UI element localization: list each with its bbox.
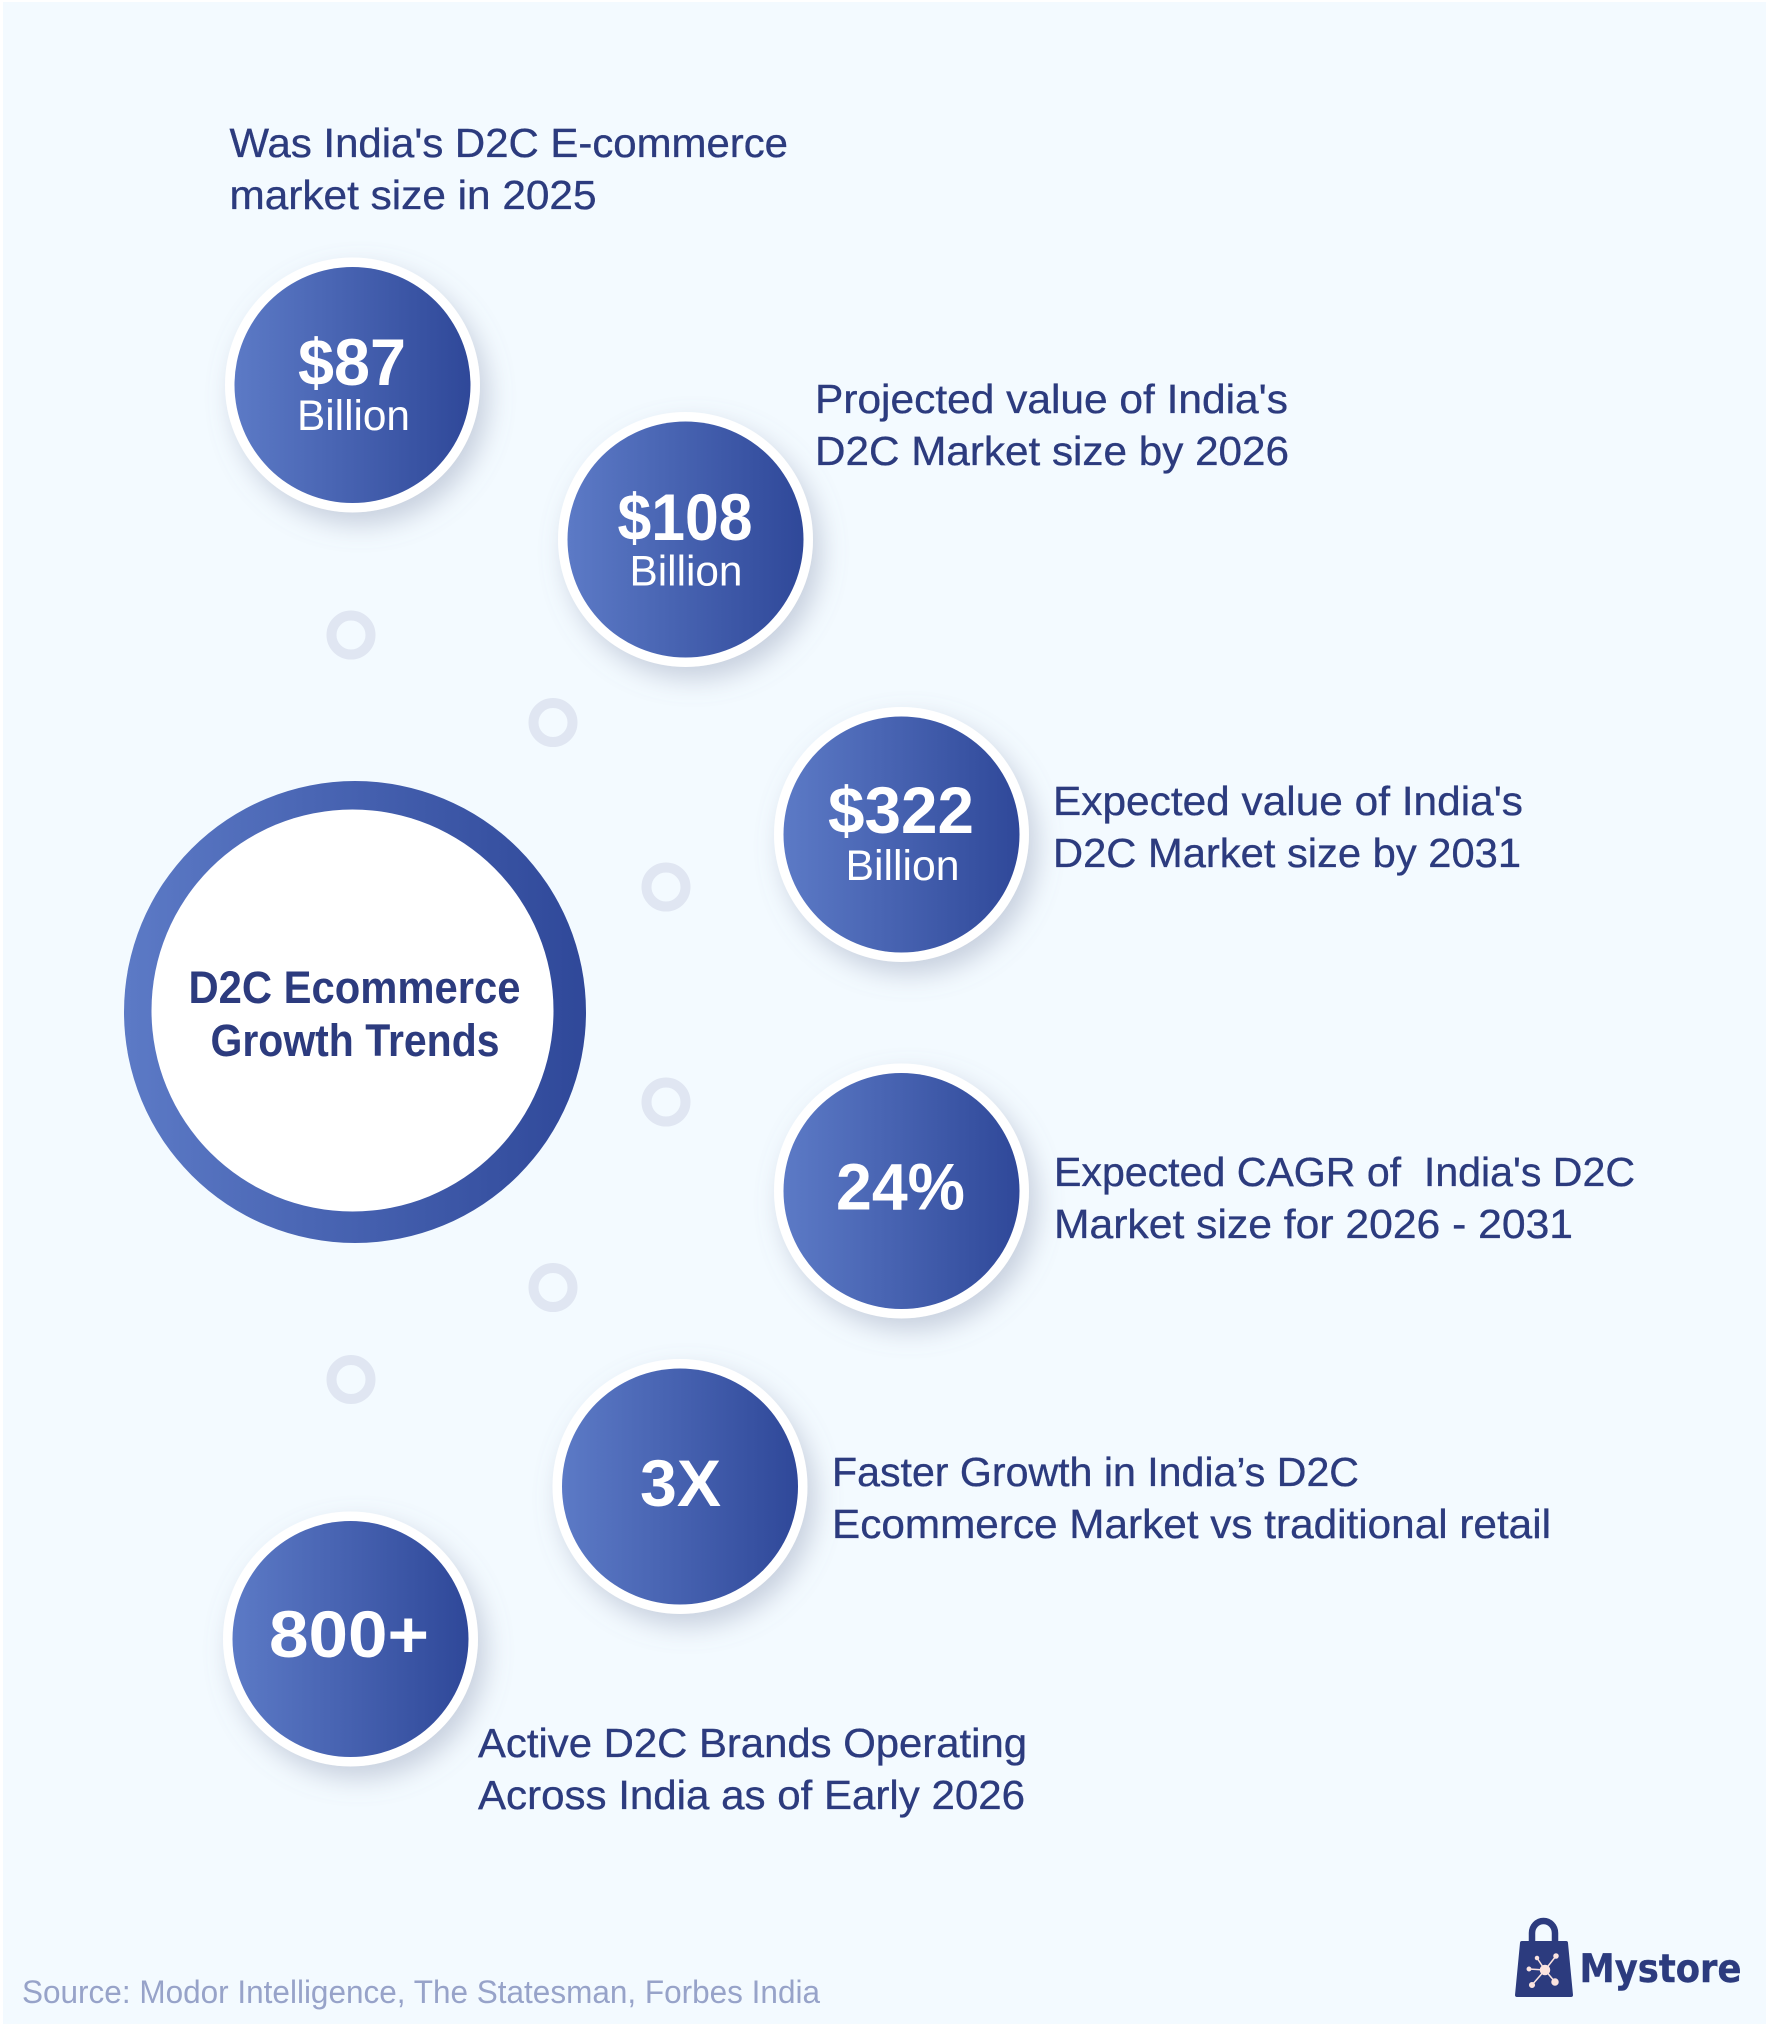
text: $322 description: D2C Market size by 2031 [1053, 830, 1521, 876]
stat: $108 Billion: $108 [618, 480, 752, 554]
logo: Mystore [1515, 1921, 1742, 1997]
icon: shopping bag [1515, 1921, 1573, 1997]
stat: $87 Billion [225, 258, 480, 512]
stat: 3X [552, 1359, 808, 1614]
text: 3X description [832, 1449, 1551, 1547]
stat: $87 Billion: $87 [298, 325, 406, 399]
text: 800+ description: Active D2C Brands Operating [478, 1720, 1027, 1766]
text: 24% description: Market size for 2026 - 2031 [1054, 1201, 1573, 1247]
stat: $322 Billion: $322 [828, 773, 974, 847]
central circle: D2C Ecommerce Growth Trends: Growth Trends [210, 1015, 500, 1066]
text: 3X description: Ecommerce Market vs traditional retail [832, 1501, 1551, 1547]
stat: 800+ [223, 1512, 478, 1766]
text: 3X description: Faster Growth in India’s D2C [832, 1449, 1359, 1495]
stat: 800+: 800+ [269, 1597, 429, 1671]
stat: $108 Billion [558, 412, 813, 667]
text: $87 description [230, 120, 788, 218]
source note: Source: Modor Intelligence, The Statesman, Forbes India [22, 1974, 820, 2010]
stat: 3X: 3X [640, 1446, 721, 1520]
stat: $108 Billion: Billion [630, 548, 742, 596]
text: $322 description [1053, 778, 1523, 876]
logo: Mystore: Mystore [1580, 1947, 1742, 1992]
stat: $87 Billion: Billion [297, 392, 410, 440]
text: $87 description: Was India's D2C E-commerce [230, 120, 788, 166]
stat: $322 Billion [774, 707, 1029, 962]
connector ring dots [332, 616, 686, 1399]
central circle: D2C Ecommerce Growth Trends: D2C Ecommerce [188, 962, 520, 1013]
text: $108 description: D2C Market size by 2026 [815, 428, 1289, 474]
text: 800+ description [478, 1720, 1027, 1818]
text: 24% description [1054, 1149, 1635, 1247]
text: 24% description: Expected CAGR of India's D2C [1054, 1149, 1635, 1195]
stat: 24% [774, 1064, 1029, 1318]
text: 800+ description: Across India as of Early 2026 [478, 1772, 1025, 1818]
stat: 24%: 24% [836, 1150, 965, 1224]
stat: $322 Billion: Billion [846, 842, 960, 890]
text: $322 description: Expected value of India's [1053, 778, 1523, 824]
text: $108 description: Projected value of India's [815, 376, 1288, 422]
text: $108 description [815, 376, 1289, 474]
text: $87 description: market size in 2025 [230, 172, 596, 218]
central circle: D2C Ecommerce Growth Trends [124, 781, 586, 1243]
